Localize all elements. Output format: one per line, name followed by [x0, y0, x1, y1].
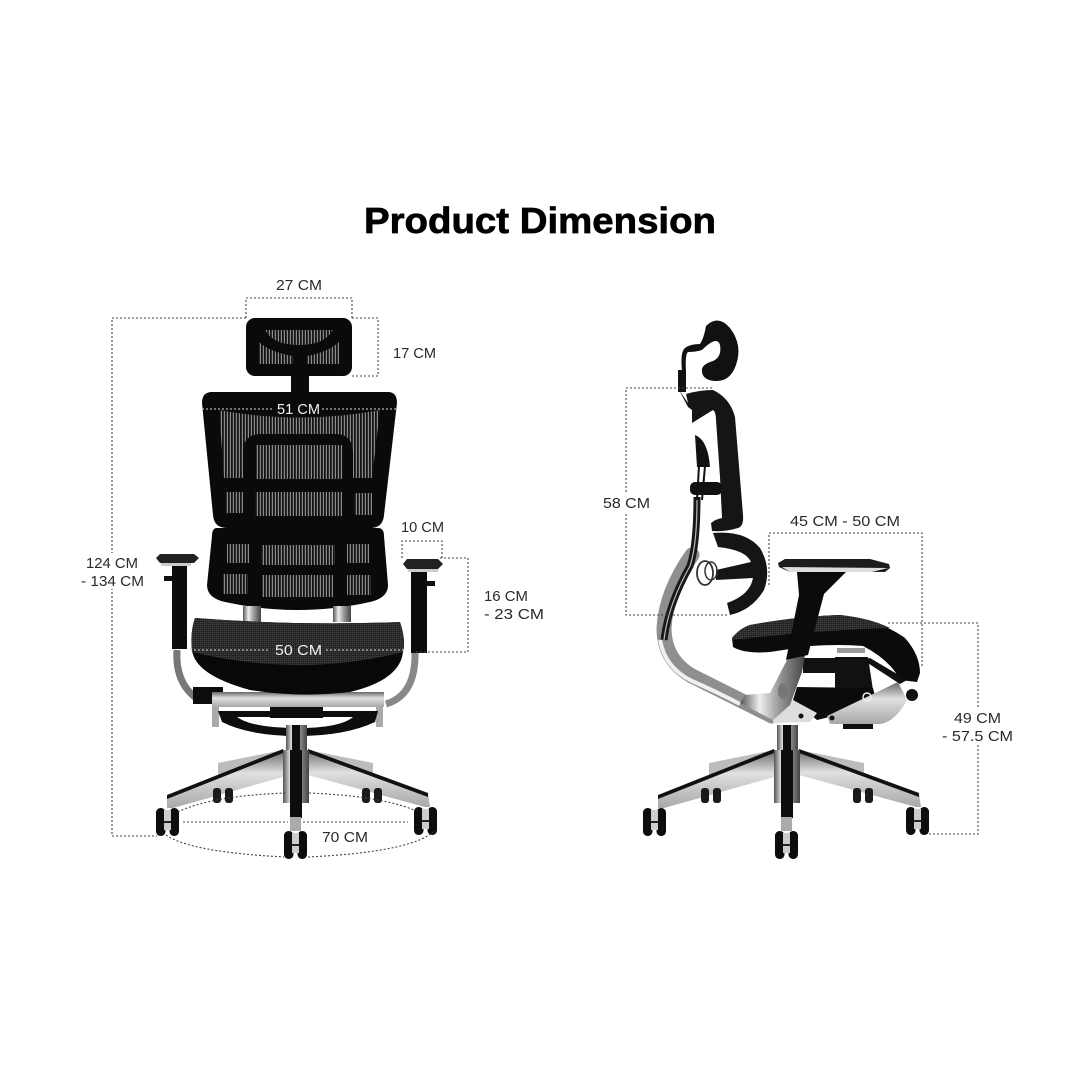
backrest upper [202, 392, 397, 528]
backrest lumbar [207, 528, 388, 610]
side star base [658, 725, 921, 831]
dimension: armrest width 10 CM: 10 CM [401, 520, 444, 536]
dimension: seat height 49-57.5 CM [888, 623, 1018, 834]
dimension: armrest height 16-23 CM: - 23 CM [484, 607, 544, 623]
dimension: total height 124-134 CM: - 134 CM [81, 574, 144, 590]
side lumbar [697, 533, 767, 615]
dimension: seat height 49-57.5 CM: 49 CM [954, 711, 1001, 727]
side view chair [643, 320, 929, 859]
side armrest [778, 559, 890, 660]
side casters [643, 788, 929, 859]
headrest [246, 318, 352, 394]
dimension: armrest height 16-23 CM: 16 CM [484, 589, 528, 605]
dimension: seat width 50 CM: 50 CM [275, 643, 322, 659]
dimension: headrest height 17 CM [352, 318, 436, 376]
side upper back [679, 390, 743, 531]
side seat [732, 615, 920, 682]
seat [191, 618, 404, 695]
dimension: base diameter 70 CM: 70 CM [322, 830, 368, 846]
dimension: headrest height 17 CM: 17 CM [393, 346, 436, 362]
side mechanism [740, 648, 918, 729]
chrome supports [177, 606, 415, 704]
dimension: total height 124-134 CM [78, 318, 246, 836]
dimension: total height 124-134 CM: 124 CM [86, 556, 138, 572]
dimension: back height 58 CM [600, 388, 728, 615]
dimension: back height 58 CM: 58 CM [603, 496, 650, 512]
left armrest [156, 554, 199, 649]
right armrest [403, 559, 443, 653]
dimension: armrest width 10 CM [401, 520, 444, 558]
dimension: seat depth 45-50 CM: 45 CM - 50 CM [790, 514, 900, 530]
dimension: seat height 49-57.5 CM: - 57.5 CM [942, 729, 1013, 745]
title: Product Dimension [364, 200, 716, 241]
front view chair [156, 318, 443, 859]
side chrome spine [660, 497, 772, 716]
star base [167, 725, 430, 831]
side headrest [678, 320, 738, 392]
dimension: headrest width 27 CM: 27 CM [276, 278, 322, 294]
dimension: armrest height 16-23 CM [414, 558, 544, 652]
dimension: base diameter 70 CM [166, 793, 433, 857]
mechanism [193, 687, 384, 736]
casters [156, 788, 437, 859]
dimension: seat depth 45-50 CM [769, 514, 922, 668]
dimension: back width 51 CM: 51 CM [277, 402, 320, 418]
dimension: headrest width 27 CM [246, 278, 352, 318]
